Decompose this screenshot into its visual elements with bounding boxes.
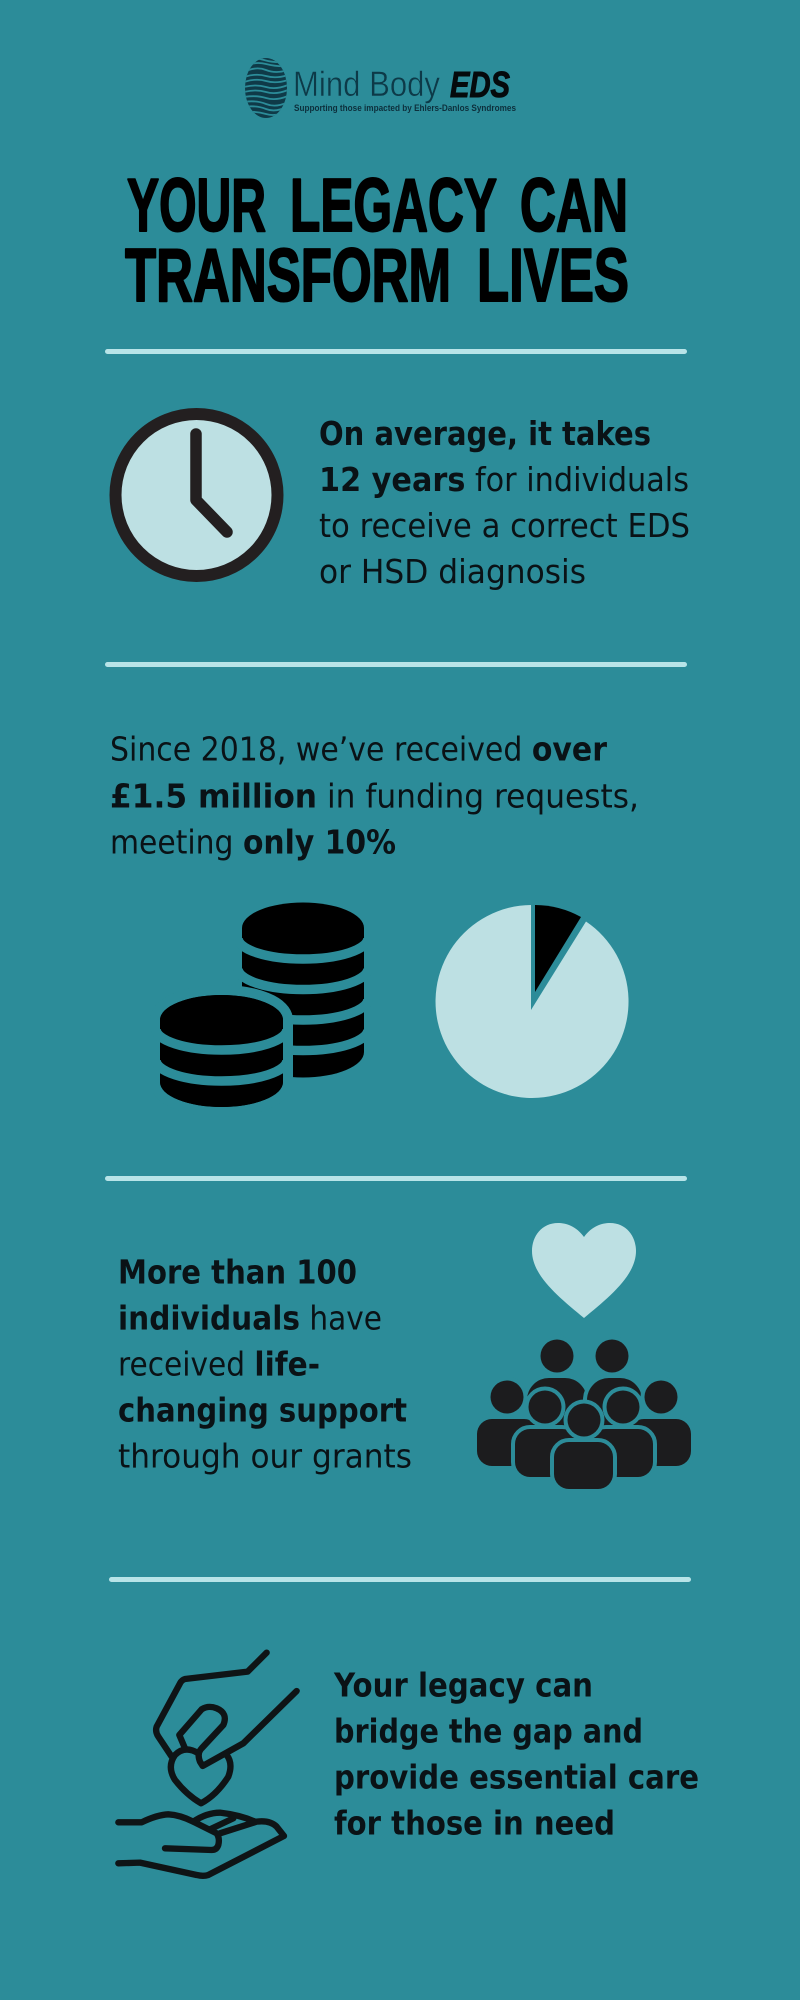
panel: call to action — [118, 1653, 699, 1876]
text: call to action — [333, 1666, 699, 1842]
title — [125, 163, 629, 317]
title: CAN — [520, 163, 628, 247]
text: diagnosis statistic: to receive a correct EDS — [319, 506, 690, 545]
text: diagnosis statistic — [319, 414, 690, 591]
text: diagnosis statistic: or HSD diagnosis — [319, 552, 586, 591]
text: diagnosis statistic: 12 years for individuals — [319, 460, 689, 499]
text: funding statistic: Since 2018, we’ve received over — [110, 730, 608, 768]
logo EDS: EDS — [450, 64, 510, 105]
text: grants statistic: More than 100 — [118, 1252, 357, 1292]
panel: funding — [110, 730, 639, 1107]
text: call to action: provide essential care — [334, 1758, 699, 1796]
text: call to action: bridge the gap and — [334, 1712, 643, 1750]
text: grants statistic: through our grants — [118, 1436, 412, 1476]
text: funding statistic: £1.5 million in funding requests, — [110, 776, 639, 816]
text: diagnosis statistic: On average, it takes — [319, 414, 651, 453]
chart: pie 10 percent met — [436, 905, 629, 1098]
text: grants statistic — [118, 1252, 412, 1476]
icon: clock — [116, 414, 278, 576]
text: funding statistic — [110, 730, 639, 862]
text: funding statistic: meeting only 10% — [110, 822, 396, 862]
title: YOUR — [127, 163, 266, 247]
text: grants statistic: received life- — [118, 1344, 320, 1384]
text: grants statistic: changing support — [118, 1390, 407, 1430]
logo: Mind Body EDS — [244, 58, 516, 118]
icon: hands giving heart — [118, 1653, 297, 1876]
logo wordmark: Mind Body — [293, 65, 440, 104]
icon: coin stacks — [156, 903, 368, 1107]
icon: fingerprint — [244, 58, 288, 118]
icon: heart — [532, 1223, 636, 1318]
title: LEGACY — [290, 163, 497, 247]
text: call to action: Your legacy can — [333, 1666, 593, 1704]
text: call to action: for those in need — [334, 1804, 615, 1842]
logo tagline: Supporting those impacted by Ehlers-Danlos Syndromes — [294, 103, 516, 114]
title: TRANSFORM — [125, 233, 451, 317]
title: LIVES — [477, 233, 629, 317]
icon: group of people — [477, 1340, 691, 1489]
panel: diagnosis time — [116, 414, 690, 591]
text: grants statistic: individuals have — [118, 1298, 382, 1338]
panel: people supported — [118, 1223, 691, 1489]
